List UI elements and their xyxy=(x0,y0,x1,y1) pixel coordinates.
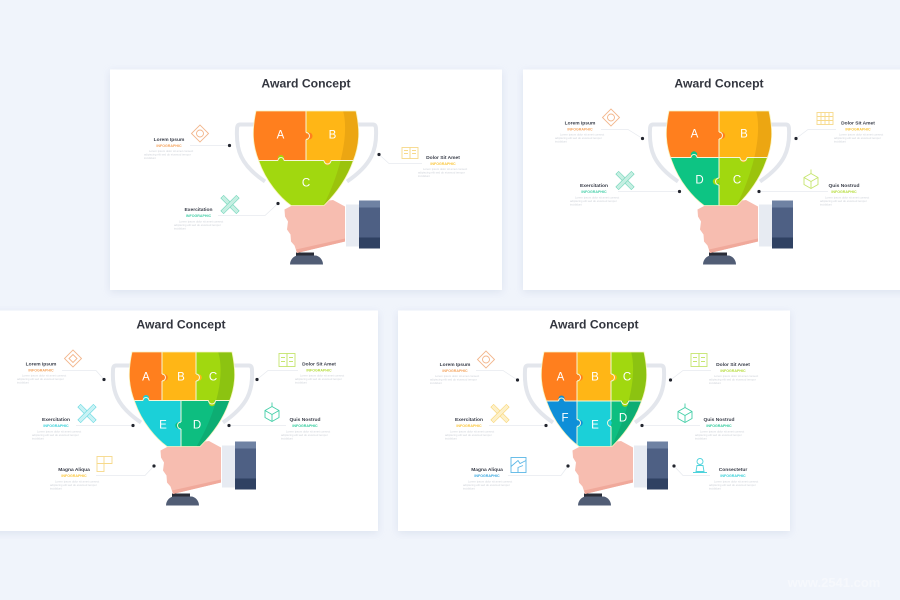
hand holding trophy xyxy=(572,441,668,494)
callout: Quis Nostrud: incididunt xyxy=(695,436,707,440)
callout: Dolor Sit Amet: INFOGRAPHIC xyxy=(306,368,332,372)
callout: Lorem Ipsum: INFOGRAPHIC xyxy=(28,368,54,372)
callout: Exercitation: INFOGRAPHIC xyxy=(186,214,211,218)
callout: Dolor Sit Amet xyxy=(377,148,467,178)
callout: Magna Aliqua xyxy=(463,458,570,490)
puzzle cup: E xyxy=(591,420,599,432)
callout: Dolor Sit Amet: INFOGRAPHIC xyxy=(430,162,456,166)
callout: Quis Nostrud: INFOGRAPHIC xyxy=(831,190,857,194)
callout: Exercitation: adipiscing elit sed do eiusmod tempor xyxy=(570,199,617,203)
callout: Exercitation: INFOGRAPHIC xyxy=(43,424,69,428)
callout: Exercitation xyxy=(445,404,548,440)
puzzle cup: A xyxy=(691,128,699,140)
callout: Dolor Sit Amet: incididunt xyxy=(295,380,307,384)
callout: Exercitation xyxy=(32,404,135,440)
callout: Dolor Sit Amet: Lorem ipsum dolor sit amet consect xyxy=(714,374,758,378)
callout: Exercitation: INFOGRAPHIC xyxy=(581,190,607,194)
callout: Dolor Sit Amet xyxy=(255,354,344,384)
puzzle cup xyxy=(663,110,775,206)
callout: Quis Nostrud xyxy=(227,402,330,440)
puzzle cup: C xyxy=(209,372,217,384)
puzzle cup: F xyxy=(561,412,569,424)
callout: Magna Aliqua: incididunt xyxy=(50,486,62,490)
callout: Magna Aliqua: adipiscing elit sed do eiusmod tempor xyxy=(50,483,97,487)
panel: three-part award concept xyxy=(110,70,502,290)
callout: Exercitation: Lorem ipsum dolor sit amet consect xyxy=(179,220,223,224)
callout: Quis Nostrud: Quis Nostrud xyxy=(704,417,734,423)
callout: Exercitation: Exercitation xyxy=(580,183,608,189)
puzzle cup: B xyxy=(177,372,185,384)
puzzle cup: B xyxy=(591,372,599,384)
puzzle cup: A xyxy=(142,372,150,384)
callout: Magna Aliqua xyxy=(50,456,156,490)
callout: Exercitation: adipiscing elit sed do eiusmod tempor xyxy=(32,433,79,437)
callout: Lorem Ipsum: Lorem ipsum dolor sit amet consect xyxy=(435,374,479,378)
trophy handles xyxy=(650,124,789,182)
callout: Exercitation: Exercitation xyxy=(455,417,483,423)
callout: Magna Aliqua: INFOGRAPHIC xyxy=(61,474,87,478)
trophy base xyxy=(578,494,611,506)
callout: Magna Aliqua: adipiscing elit sed do eiusmod tempor xyxy=(463,483,510,487)
puzzle cup: B xyxy=(740,128,748,140)
callout: Quis Nostrud: Lorem ipsum dolor sit amet consect xyxy=(286,430,330,434)
callout: Quis Nostrud: Quis Nostrud xyxy=(290,417,320,423)
callout: Exercitation: adipiscing elit sed do eiusmod tempor xyxy=(445,433,492,437)
callout: Magna Aliqua: Lorem ipsum dolor sit amet consect xyxy=(55,480,99,484)
callout: Consectetur xyxy=(672,458,758,490)
callout: Lorem Ipsum: Lorem Ipsum xyxy=(565,121,596,127)
trophy base xyxy=(703,252,736,264)
callout: Exercitation: incididunt xyxy=(174,226,186,230)
puzzle cup xyxy=(250,110,362,206)
callout: Lorem Ipsum: Lorem Ipsum xyxy=(440,362,471,368)
callout: Quis Nostrud xyxy=(757,170,869,206)
callout: Dolor Sit Amet: adipiscing elit sed do eiusmod tempor xyxy=(295,377,342,381)
callout: Quis Nostrud: Lorem ipsum dolor sit amet consect xyxy=(700,430,744,434)
callout: Exercitation: INFOGRAPHIC xyxy=(456,424,482,428)
callout: Lorem Ipsum: adipiscing elit sed do eiusmod tempor xyxy=(430,378,477,382)
callout: Quis Nostrud: INFOGRAPHIC xyxy=(706,424,732,428)
callout: Exercitation: Lorem ipsum dolor sit amet consect xyxy=(450,430,494,434)
callout: Dolor Sit Amet: Lorem ipsum dolor sit amet consect xyxy=(423,167,467,171)
callout: Consectetur: incididunt xyxy=(709,486,721,490)
callout: Quis Nostrud: incididunt xyxy=(281,436,293,440)
callout: Magna Aliqua: Magna Aliqua xyxy=(58,467,90,473)
callout: Exercitation: Exercitation xyxy=(42,417,70,423)
puzzle cup: C xyxy=(302,178,310,190)
callout: Lorem Ipsum: Lorem ipsum dolor sit amet consect xyxy=(560,132,604,136)
hand holding trophy xyxy=(160,441,256,494)
callout: Lorem Ipsum xyxy=(555,109,644,144)
callout: Lorem Ipsum: INFOGRAPHIC xyxy=(567,127,593,131)
callout: Lorem Ipsum: INFOGRAPHIC xyxy=(442,369,468,373)
callout: Exercitation: Lorem ipsum dolor sit amet consect xyxy=(575,196,619,200)
puzzle cup: C xyxy=(733,174,741,186)
callout: Lorem Ipsum xyxy=(17,350,106,384)
panel: five-part award concept xyxy=(0,310,378,531)
callout: Consectetur: INFOGRAPHIC xyxy=(720,474,746,478)
callout: Lorem Ipsum: Lorem ipsum dolor sit amet consect xyxy=(22,374,66,378)
callout: Dolor Sit Amet: Dolor Sit Amet xyxy=(302,362,336,368)
trophy base xyxy=(166,494,199,506)
trophy handles xyxy=(525,366,664,422)
heading: Award Concept xyxy=(261,76,351,90)
callout: Dolor Sit Amet: Dolor Sit Amet xyxy=(716,362,750,368)
callout: Quis Nostrud: Lorem ipsum dolor sit amet consect xyxy=(825,196,869,200)
callout: Consectetur: adipiscing elit sed do eiusmod tempor xyxy=(709,483,756,487)
callout: Lorem Ipsum: incididunt xyxy=(144,156,156,160)
callout: Quis Nostrud: adipiscing elit sed do eiusmod tempor xyxy=(820,199,867,203)
callout: Dolor Sit Amet: Dolor Sit Amet xyxy=(426,155,460,161)
callout: Lorem Ipsum: adipiscing elit sed do eiusmod tempor xyxy=(17,377,64,381)
hand holding trophy xyxy=(698,200,793,253)
callout: Lorem Ipsum: incididunt xyxy=(430,381,442,385)
callout: Dolor Sit Amet: adipiscing elit sed do eiusmod tempor xyxy=(418,170,465,174)
callout: Magna Aliqua: INFOGRAPHIC xyxy=(474,474,500,478)
heading: Award Concept xyxy=(549,318,639,332)
trophy base xyxy=(290,252,323,264)
puzzle cup: D xyxy=(619,412,627,424)
watermark: www.2541.com xyxy=(787,575,880,590)
callout: Dolor Sit Amet: Dolor Sit Amet xyxy=(841,121,875,127)
callout: Exercitation: adipiscing elit sed do eiusmod tempor xyxy=(174,223,221,227)
callout: Lorem Ipsum: incididunt xyxy=(17,380,29,384)
puzzle cup: D xyxy=(193,420,201,432)
panel: four-part award concept xyxy=(523,70,900,290)
callout: Lorem Ipsum xyxy=(144,125,231,160)
hand holding trophy xyxy=(284,200,380,253)
puzzle cup: A xyxy=(277,130,285,142)
callout: Dolor Sit Amet: INFOGRAPHIC xyxy=(845,127,871,131)
callout: Quis Nostrud: adipiscing elit sed do eiusmod tempor xyxy=(695,433,742,437)
callout: Dolor Sit Amet: incididunt xyxy=(418,174,430,178)
callout: Magna Aliqua: Lorem ipsum dolor sit amet consect xyxy=(468,480,512,484)
callout: Lorem Ipsum: adipiscing elit sed do eiusmod tempor xyxy=(555,136,602,140)
heading: Award Concept xyxy=(674,76,764,90)
callout: Exercitation: incididunt xyxy=(32,436,44,440)
callout: Consectetur: Lorem ipsum dolor sit amet consect xyxy=(714,480,758,484)
callout: Lorem Ipsum: Lorem Ipsum xyxy=(26,362,57,368)
callout: Lorem Ipsum: adipiscing elit sed do eiusmod tempor xyxy=(144,152,191,156)
callout: Exercitation: Exercitation xyxy=(184,207,213,213)
callout: Dolor Sit Amet: Lorem ipsum dolor sit amet consect xyxy=(839,132,883,136)
panel: six-part award concept xyxy=(398,310,790,531)
callout: Magna Aliqua: Magna Aliqua xyxy=(471,467,503,473)
callout: Dolor Sit Amet: incididunt xyxy=(834,140,846,144)
callout: Lorem Ipsum xyxy=(430,351,519,385)
callout: Dolor Sit Amet: adipiscing elit sed do eiusmod tempor xyxy=(709,378,756,382)
callout: Dolor Sit Amet: adipiscing elit sed do eiusmod tempor xyxy=(834,136,881,140)
callout: Dolor Sit Amet: incididunt xyxy=(709,381,721,385)
puzzle cup: E xyxy=(159,420,167,432)
callout: Exercitation xyxy=(570,171,681,206)
callout: Exercitation xyxy=(174,195,280,230)
callout: Dolor Sit Amet xyxy=(794,112,883,144)
callout: Lorem Ipsum: Lorem ipsum dolor sit amet consect xyxy=(149,149,193,153)
callout: Lorem Ipsum: INFOGRAPHIC xyxy=(156,144,182,148)
callout: Exercitation: Lorem ipsum dolor sit amet consect xyxy=(37,430,81,434)
puzzle cup: D xyxy=(695,174,704,186)
callout: Quis Nostrud: adipiscing elit sed do eiusmod tempor xyxy=(281,433,328,437)
callout: Exercitation: incididunt xyxy=(570,202,582,206)
callout: Quis Nostrud: incididunt xyxy=(820,202,832,206)
callout: Exercitation: incididunt xyxy=(445,436,457,440)
callout: Dolor Sit Amet xyxy=(669,354,758,385)
callout: Quis Nostrud xyxy=(640,404,744,440)
puzzle cup: B xyxy=(329,130,337,142)
callout: Quis Nostrud: Quis Nostrud xyxy=(829,183,859,189)
puzzle cup: A xyxy=(557,372,565,384)
trophy handles xyxy=(113,366,252,422)
heading: Award Concept xyxy=(136,318,226,332)
callout: Quis Nostrud: INFOGRAPHIC xyxy=(292,424,318,428)
callout: Dolor Sit Amet: INFOGRAPHIC xyxy=(720,369,746,373)
callout: Lorem Ipsum: incididunt xyxy=(555,140,567,144)
callout: Dolor Sit Amet: Lorem ipsum dolor sit amet consect xyxy=(300,374,344,378)
callout: Magna Aliqua: incididunt xyxy=(463,486,475,490)
puzzle cup: C xyxy=(623,372,631,384)
callout: Lorem Ipsum: Lorem Ipsum xyxy=(154,137,185,143)
callout: Consectetur: Consectetur xyxy=(719,467,747,473)
puzzle cup xyxy=(538,350,650,448)
trophy handles xyxy=(237,124,376,182)
puzzle cup xyxy=(126,350,238,448)
